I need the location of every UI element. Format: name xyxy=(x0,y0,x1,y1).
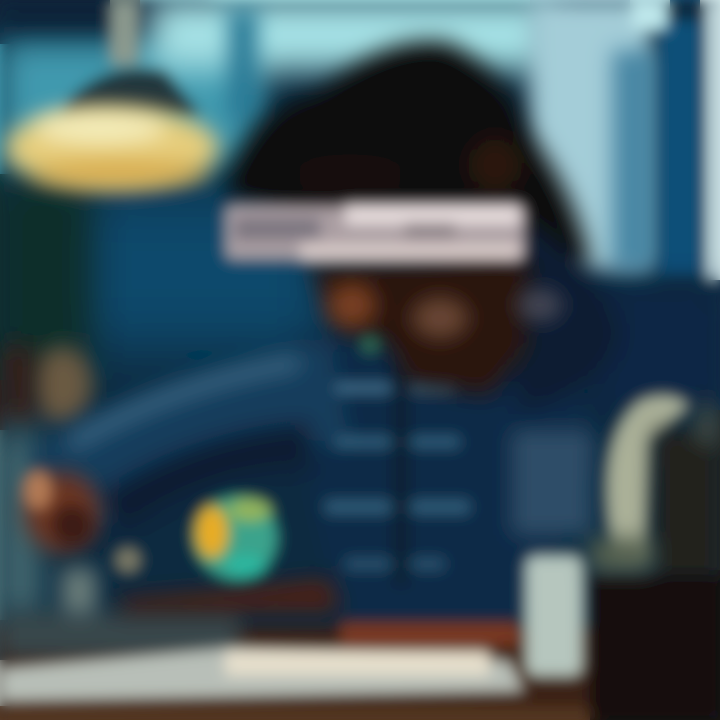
person: shirt and arm xyxy=(30,330,600,625)
desk surface and paper xyxy=(0,612,600,720)
right side: window building xyxy=(530,0,720,410)
icon: ceiling lamp xyxy=(6,0,218,188)
person: hair xyxy=(225,40,620,410)
icon: small globe xyxy=(194,496,278,580)
hand reaching toward the globe xyxy=(24,470,340,614)
text band: blurred overlay caption xyxy=(225,205,525,260)
person: face xyxy=(310,260,562,395)
right foreground: dark object with pale handle xyxy=(525,395,720,720)
